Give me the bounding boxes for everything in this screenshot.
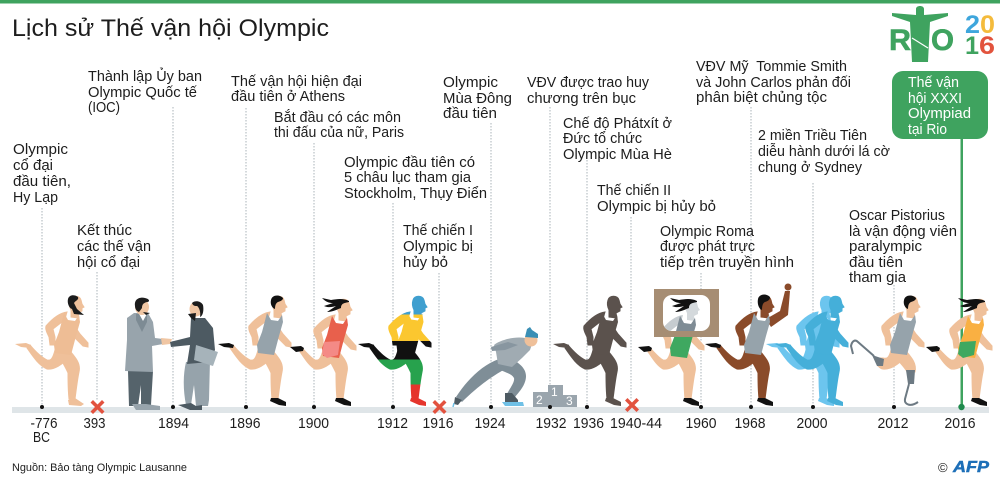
text: 1912 event: Stockholm, Thụy Điển <box>344 186 487 202</box>
text: 1968 event <box>696 59 851 106</box>
callout: Rio 2016 <box>892 71 988 406</box>
runner: 2016 Rio woman <box>926 298 992 406</box>
text: 2000 event <box>758 128 890 176</box>
AFP credit: AFP <box>952 459 989 476</box>
text: 1932 event: VĐV được trao huy <box>527 75 650 91</box>
X marks: cancelled games <box>90 398 639 414</box>
icon: medal podium: 2 <box>536 393 543 407</box>
text: 1960 event: tiếp trên truyền hình <box>660 255 794 271</box>
text: 2000 event: 2 miền Triều Tiên <box>758 128 867 144</box>
year labels: 393 <box>84 415 106 432</box>
source: Nguồn: Bảo tàng Olympic Lausanne <box>12 462 187 474</box>
text: 1940-44 event: Olympic bị hủy bỏ <box>597 199 716 215</box>
man with folder <box>170 301 218 410</box>
text: 1894 event: Thành lập Ủy ban <box>88 67 202 85</box>
text: 1936 event <box>563 116 672 163</box>
year labels: 2016 <box>944 415 976 432</box>
text: 1924 event: đầu tiên <box>443 106 497 122</box>
text: 393 event <box>77 223 151 271</box>
callout: Rio 2016: hội XXXI <box>908 91 962 107</box>
year labels: 1912 <box>377 415 408 432</box>
icon: medal podium: 3 <box>566 394 573 408</box>
text: -776 event: đầu tiên, <box>13 174 71 190</box>
text: -776 event: Hy Lạp <box>13 190 58 206</box>
text: 1916 event: hủy bỏ <box>403 255 448 271</box>
text: 1968 event: phân biệt chủng tộc <box>696 90 827 106</box>
text: 1924 event: Mùa Đông <box>443 91 512 107</box>
front silhouette <box>775 296 848 406</box>
2016 digits: 0 <box>980 11 995 39</box>
runner: 1968 dark-skinned athlete raising fist <box>705 284 792 406</box>
text: 1896 event: Thế vận hội hiện đại <box>231 74 362 90</box>
text: 1924 event <box>443 75 512 122</box>
text: 1932 event: chương trên bục <box>527 91 636 107</box>
runner: 1912 Olympic ring colours <box>358 296 431 406</box>
year labels: 1896 <box>230 415 260 432</box>
callout: Rio 2016: Olympiad <box>908 106 971 122</box>
AFP credit <box>938 459 989 476</box>
text: 2012 event: tham gia <box>849 270 907 286</box>
year labels: 2000 <box>796 415 828 432</box>
text: 1916 event <box>403 223 473 271</box>
icon: Christ statue with RIO <box>889 6 954 62</box>
timeline year markers <box>40 404 965 410</box>
icon: two men shaking hands <box>125 298 218 410</box>
rear silhouette <box>766 296 839 406</box>
text: 1924 event: Olympic <box>443 75 498 91</box>
runner: ancient nude athlete <box>15 295 88 406</box>
runner body <box>638 315 704 406</box>
text: 2012 event: paralympic <box>849 239 922 255</box>
text: 393 event: hội cổ đại <box>77 255 140 271</box>
year labels: 1900 <box>298 415 329 432</box>
text: 393 event: các thế vận <box>77 239 151 255</box>
year labels: -776 <box>30 415 58 432</box>
text: 1894 event: (IOC) <box>88 100 120 116</box>
year labels: 1960 <box>686 415 716 432</box>
text: 1896 event <box>231 74 362 105</box>
callout: Rio 2016: tại Rio <box>908 122 947 138</box>
text: 1916 event: Olympic bị <box>403 239 473 255</box>
text: 1912 event <box>344 155 487 202</box>
runner: 1936 silhouette <box>553 296 626 406</box>
text: -776 event <box>13 142 71 206</box>
text: 1968 event: và John Carlos phản đối <box>696 75 851 91</box>
runner: 1896 man <box>218 296 291 406</box>
year labels: BC <box>33 429 50 446</box>
text: 1916 event: Thế chiến I <box>403 223 473 239</box>
top bar <box>0 0 1000 4</box>
year labels: 1924 <box>474 415 506 432</box>
text: 1960 event <box>660 224 794 271</box>
year labels: 2012 <box>878 415 908 432</box>
text: 2012 event: đầu tiên <box>849 255 903 271</box>
year labels: 1916 <box>422 415 454 432</box>
text: 1894 event: Olympic Quốc tế <box>88 85 197 101</box>
runner: 1900 woman <box>290 298 356 406</box>
icon: speed skater <box>453 327 538 407</box>
2016 digits <box>965 11 995 60</box>
prosthetic blades <box>851 341 918 405</box>
icon: Christ statue with RIO: O <box>931 24 954 57</box>
text: 1900 event: Bắt đầu có các môn <box>274 109 401 126</box>
text: 1940-44 event <box>597 183 716 215</box>
text: 1960 event: được phát trực <box>660 239 755 255</box>
text: 2012 event: là vận động viên <box>849 224 957 240</box>
icon: medal podium <box>533 385 577 408</box>
title: Lịch sử Thế vận hội Olympic <box>12 15 329 42</box>
hands <box>161 338 172 345</box>
text: 1912 event: 5 châu lục tham gia <box>344 170 472 186</box>
text: 2000 event: chung ở Sydney <box>758 160 863 176</box>
text: 1900 event: thi đấu của nữ, Paris <box>274 125 404 141</box>
text: 1936 event: Olympic Mùa Hè <box>563 147 672 163</box>
text: 1936 event: Chế độ Phátxít ở <box>563 116 672 132</box>
Rio 2016 logo <box>889 6 995 62</box>
year labels: 1968 <box>734 415 766 432</box>
text: 1900 event <box>274 109 404 141</box>
text: -776 event: cổ đại <box>13 158 53 174</box>
2016 digits: 2 <box>965 11 980 39</box>
text: 1936 event: Đức tổ chức <box>563 131 642 147</box>
text: 1894 event <box>88 67 202 116</box>
icon: medal podium: 1 <box>551 385 558 399</box>
text: 2012 event <box>849 208 957 286</box>
year labels: 1932 <box>536 415 566 432</box>
runner: 1960 woman on television <box>638 289 719 406</box>
timeline axis <box>12 407 989 413</box>
2016 digits: 6 <box>979 32 995 60</box>
2016 digits: 1 <box>965 32 979 60</box>
year labels: 1940-44 <box>610 415 662 432</box>
text: 1960 event: Olympic Roma <box>660 224 755 240</box>
text: 1932 event <box>527 75 650 107</box>
text: 1968 event: VĐV Mỹ Tommie Smith <box>696 59 847 75</box>
icon: Christ statue with RIO: R <box>889 24 911 57</box>
icon: television <box>654 289 719 337</box>
callout: Rio 2016: Thế vận <box>908 75 959 91</box>
text: 2000 event: diễu hành dưới lá cờ <box>758 143 890 160</box>
runner: 2012 Oscar Pistorius with prosthetics <box>851 296 924 405</box>
text: 1912 event: Olympic đầu tiên có <box>344 155 475 171</box>
year labels: 1936 <box>573 415 604 432</box>
text: 2012 event: Oscar Pistorius <box>849 208 945 224</box>
AFP credit: © <box>938 460 948 475</box>
text: 1896 event: đầu tiên ở Athens <box>231 89 345 105</box>
text: 1940-44 event: Thế chiến II <box>597 183 671 199</box>
year labels <box>30 415 976 446</box>
man with frock coat <box>125 298 163 410</box>
text: -776 event: Olympic <box>13 142 68 158</box>
runner: 2000 unified Korea double silhouette <box>766 296 848 406</box>
text: 393 event: Kết thúc <box>77 223 132 239</box>
timeline connector lines <box>42 107 894 405</box>
year labels: 1894 <box>158 415 189 432</box>
